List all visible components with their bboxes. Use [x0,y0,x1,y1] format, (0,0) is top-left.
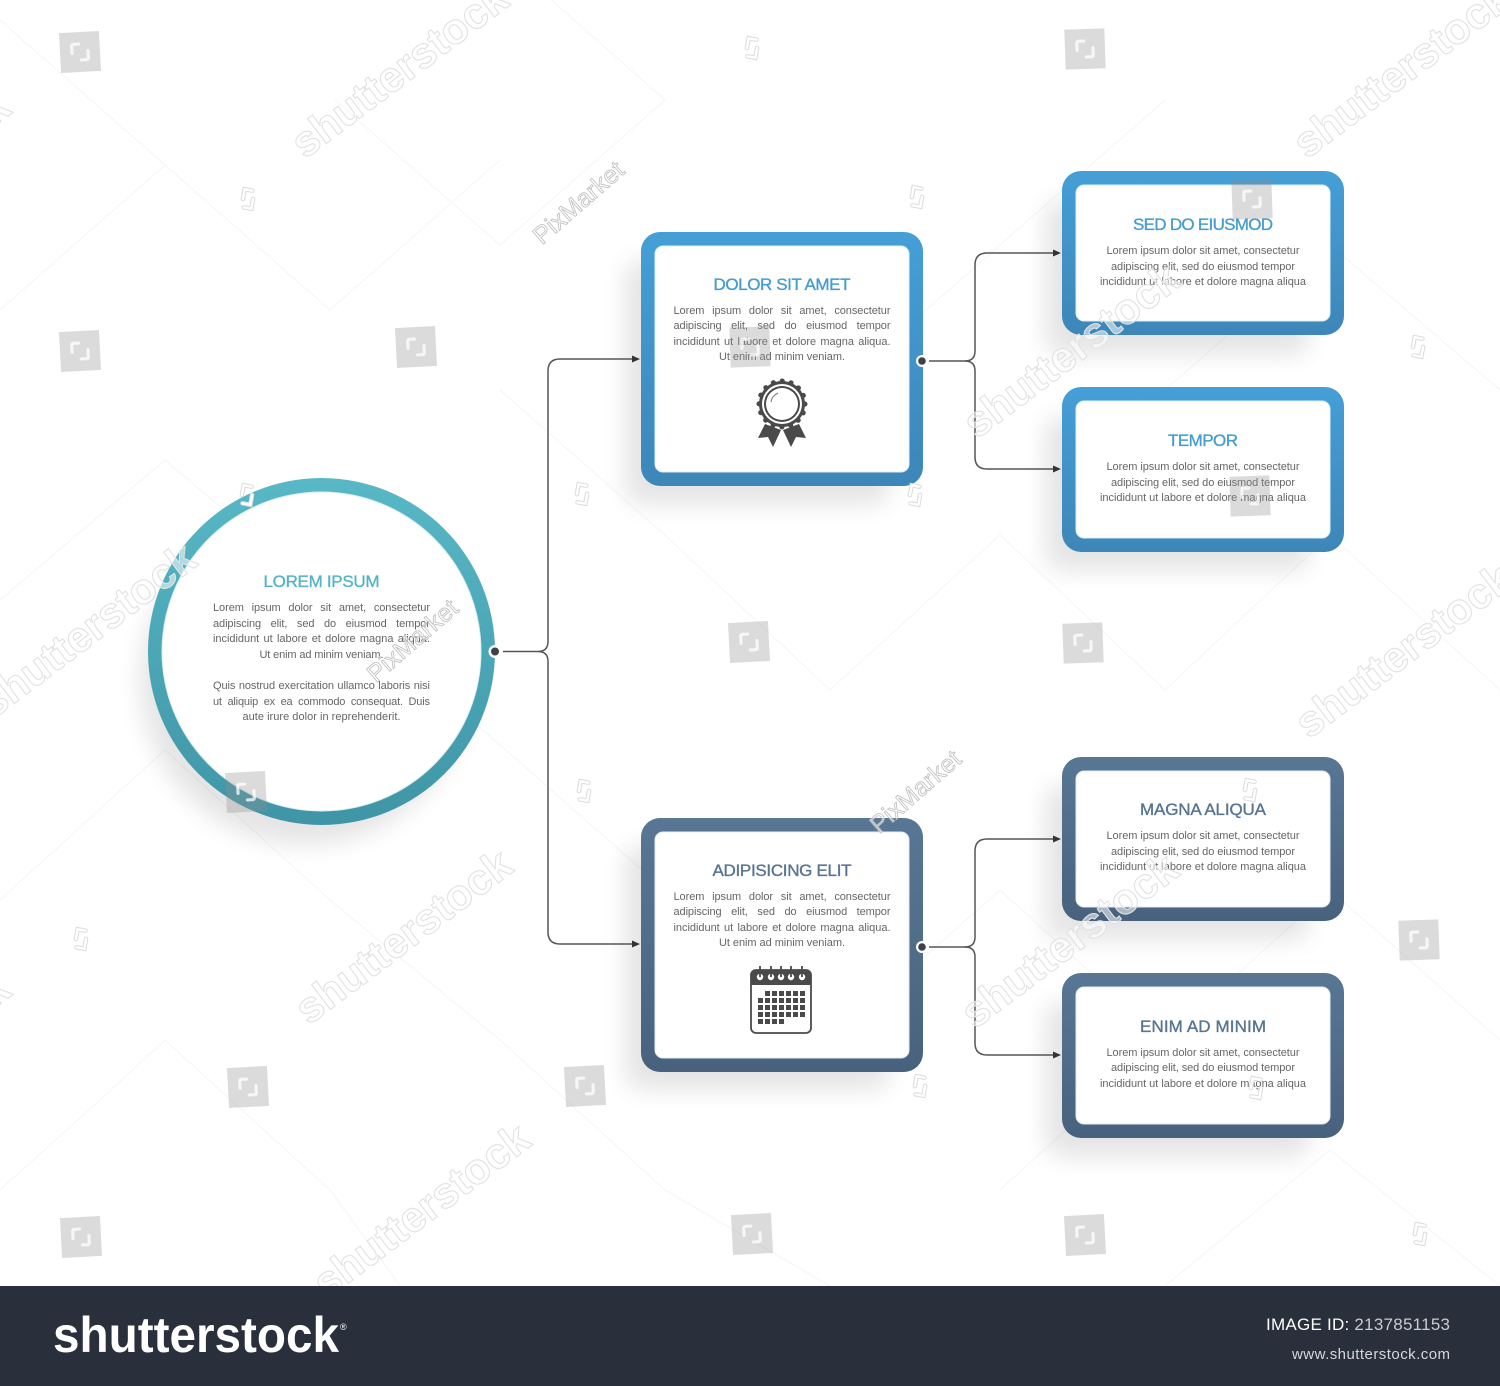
watermark: pixmarket text: PixMarket [362,594,464,688]
text block: adipisicing elit body: incididunt ut labore et dolore magna aliqua. [674,922,890,934]
footer image id: IMAGE ID: 2137851153 [1266,1315,1450,1334]
panel: magna aliqua [1062,757,1344,921]
text block: magna aliqua body: incididunt ut labore et dolore magna aliqua [1100,861,1307,873]
connector dot: circle [488,645,502,658]
connector dot: dolor sit amet [916,355,928,367]
text block: enim ad minim body: Lorem ipsum dolor sit amet, consectetur [1106,1047,1300,1059]
heading: sed do eiusmod: SED DO EIUSMOD [1133,215,1273,234]
text block: enim ad minim body [1100,1047,1307,1090]
watermark: small squiggles [75,38,1426,1244]
panel: tempor [1062,387,1344,552]
watermark: shutterstock diagonal text: shutterstock [952,844,1187,1038]
text block: dolor sit amet body: adipiscing elit, sed do eiusmod tempor [674,320,891,332]
panel: adipisicing elit [641,818,923,1072]
watermark: pixmarket text: PixMarket [865,745,967,839]
watermark: pixmarket text: PixMarket [528,156,630,250]
text block: circle body: aute irure dolor in reprehenderit. [242,711,400,723]
text block: adipisicing elit body: Lorem ipsum dolor sit amet, consectetur [674,891,891,903]
long shadows [140,200,1310,1157]
footer website: www.shutterstock.com [1291,1346,1450,1363]
connector: navy box to sub boxes [929,836,1061,1058]
text block: enim ad minim body: adipiscing elit, sed do eiusmod tempor [1111,1062,1295,1074]
text block: dolor sit amet body [674,305,891,363]
connector: blue box to sub boxes [929,250,1061,472]
panel: dolor sit amet [641,232,923,486]
text block: tempor body: adipiscing elit, sed do eiusmod tempor [1111,477,1295,489]
heading: adipisicing elit: ADIPISICING ELIT [712,861,852,880]
footer logo: shutterstock: shutterstock [53,1307,339,1363]
connector: circle to main boxes [503,356,640,948]
panel: sed do eiusmod [1062,171,1344,335]
text block: dolor sit amet body: Lorem ipsum dolor sit amet, consectetur [674,305,891,317]
footer bar [0,1286,1500,1386]
text block: tempor body [1100,461,1307,504]
connector dot: adipisicing elit [916,941,928,953]
panel: lorem ipsum circle [148,478,495,825]
text block: circle body: incididunt ut labore et dolore magna aliqua. [213,633,430,645]
heading: tempor: TEMPOR [1168,431,1238,450]
panel: enim ad minim [1062,973,1344,1138]
watermark: shutterstock diagonal text: shutterstock [286,840,521,1034]
text block: circle body: Ut enim ad minim veniam. [260,649,384,661]
text block: tempor body: incididunt ut labore et dolore magna aliqua [1100,492,1307,504]
text block: adipisicing elit body: adipiscing elit, sed do eiusmod tempor [674,906,891,918]
text block: adipisicing elit body [674,891,891,949]
heading: dolor sit amet: DOLOR SIT AMET [714,275,850,294]
text block: circle body: Quis nostrud exercitation ullamco laboris nisi [213,680,430,692]
text block: enim ad minim body: incididunt ut labore et dolore magna aliqua [1100,1078,1307,1090]
text block: tempor body: Lorem ipsum dolor sit amet, consectetur [1106,461,1300,473]
watermark: shutterstock diagonal text: shutterstock [304,1114,539,1308]
text block: circle body: ut aliquip ex ea commodo consequat. Duis [213,696,430,708]
heading: magna aliqua: MAGNA ALIQUA [1140,800,1267,819]
text block: magna aliqua body: adipiscing elit, sed do eiusmod tempor [1111,846,1295,858]
text block: magna aliqua body: Lorem ipsum dolor sit amet, consectetur [1106,830,1300,842]
watermark: pixmarket text [362,156,967,839]
text block: circle body: Lorem ipsum dolor sit amet, consectetur [213,602,430,614]
text block: sed do eiusmod body: Lorem ipsum dolor sit amet, consectetur [1106,245,1300,257]
heading: lorem ipsum: LOREM IPSUM [264,572,380,591]
text block: dolor sit amet body: Ut enim ad minim veniam. [719,351,845,363]
text block: dolor sit amet body: incididunt ut labore et dolore magna aliqua. [674,336,890,348]
text block: circle body: adipiscing elit, sed do eiusmod tempor [213,618,430,630]
icon: award rosette [758,381,806,447]
text block: circle body [213,602,430,723]
text block: sed do eiusmod body [1100,245,1307,288]
footer registered mark: ® [340,1322,347,1332]
watermark: shutterstock diagonal text: shutterstock [954,254,1189,448]
icon: calendar [751,966,811,1033]
heading: enim ad minim: ENIM AD MINIM [1140,1017,1266,1036]
text block: sed do eiusmod body: incididunt ut labore et dolore magna aliqua [1100,276,1307,288]
text block: adipisicing elit body: Ut enim ad minim veniam. [719,937,845,949]
text block: sed do eiusmod body: adipiscing elit, sed do eiusmod tempor [1111,261,1295,273]
text block: magna aliqua body [1100,830,1307,873]
